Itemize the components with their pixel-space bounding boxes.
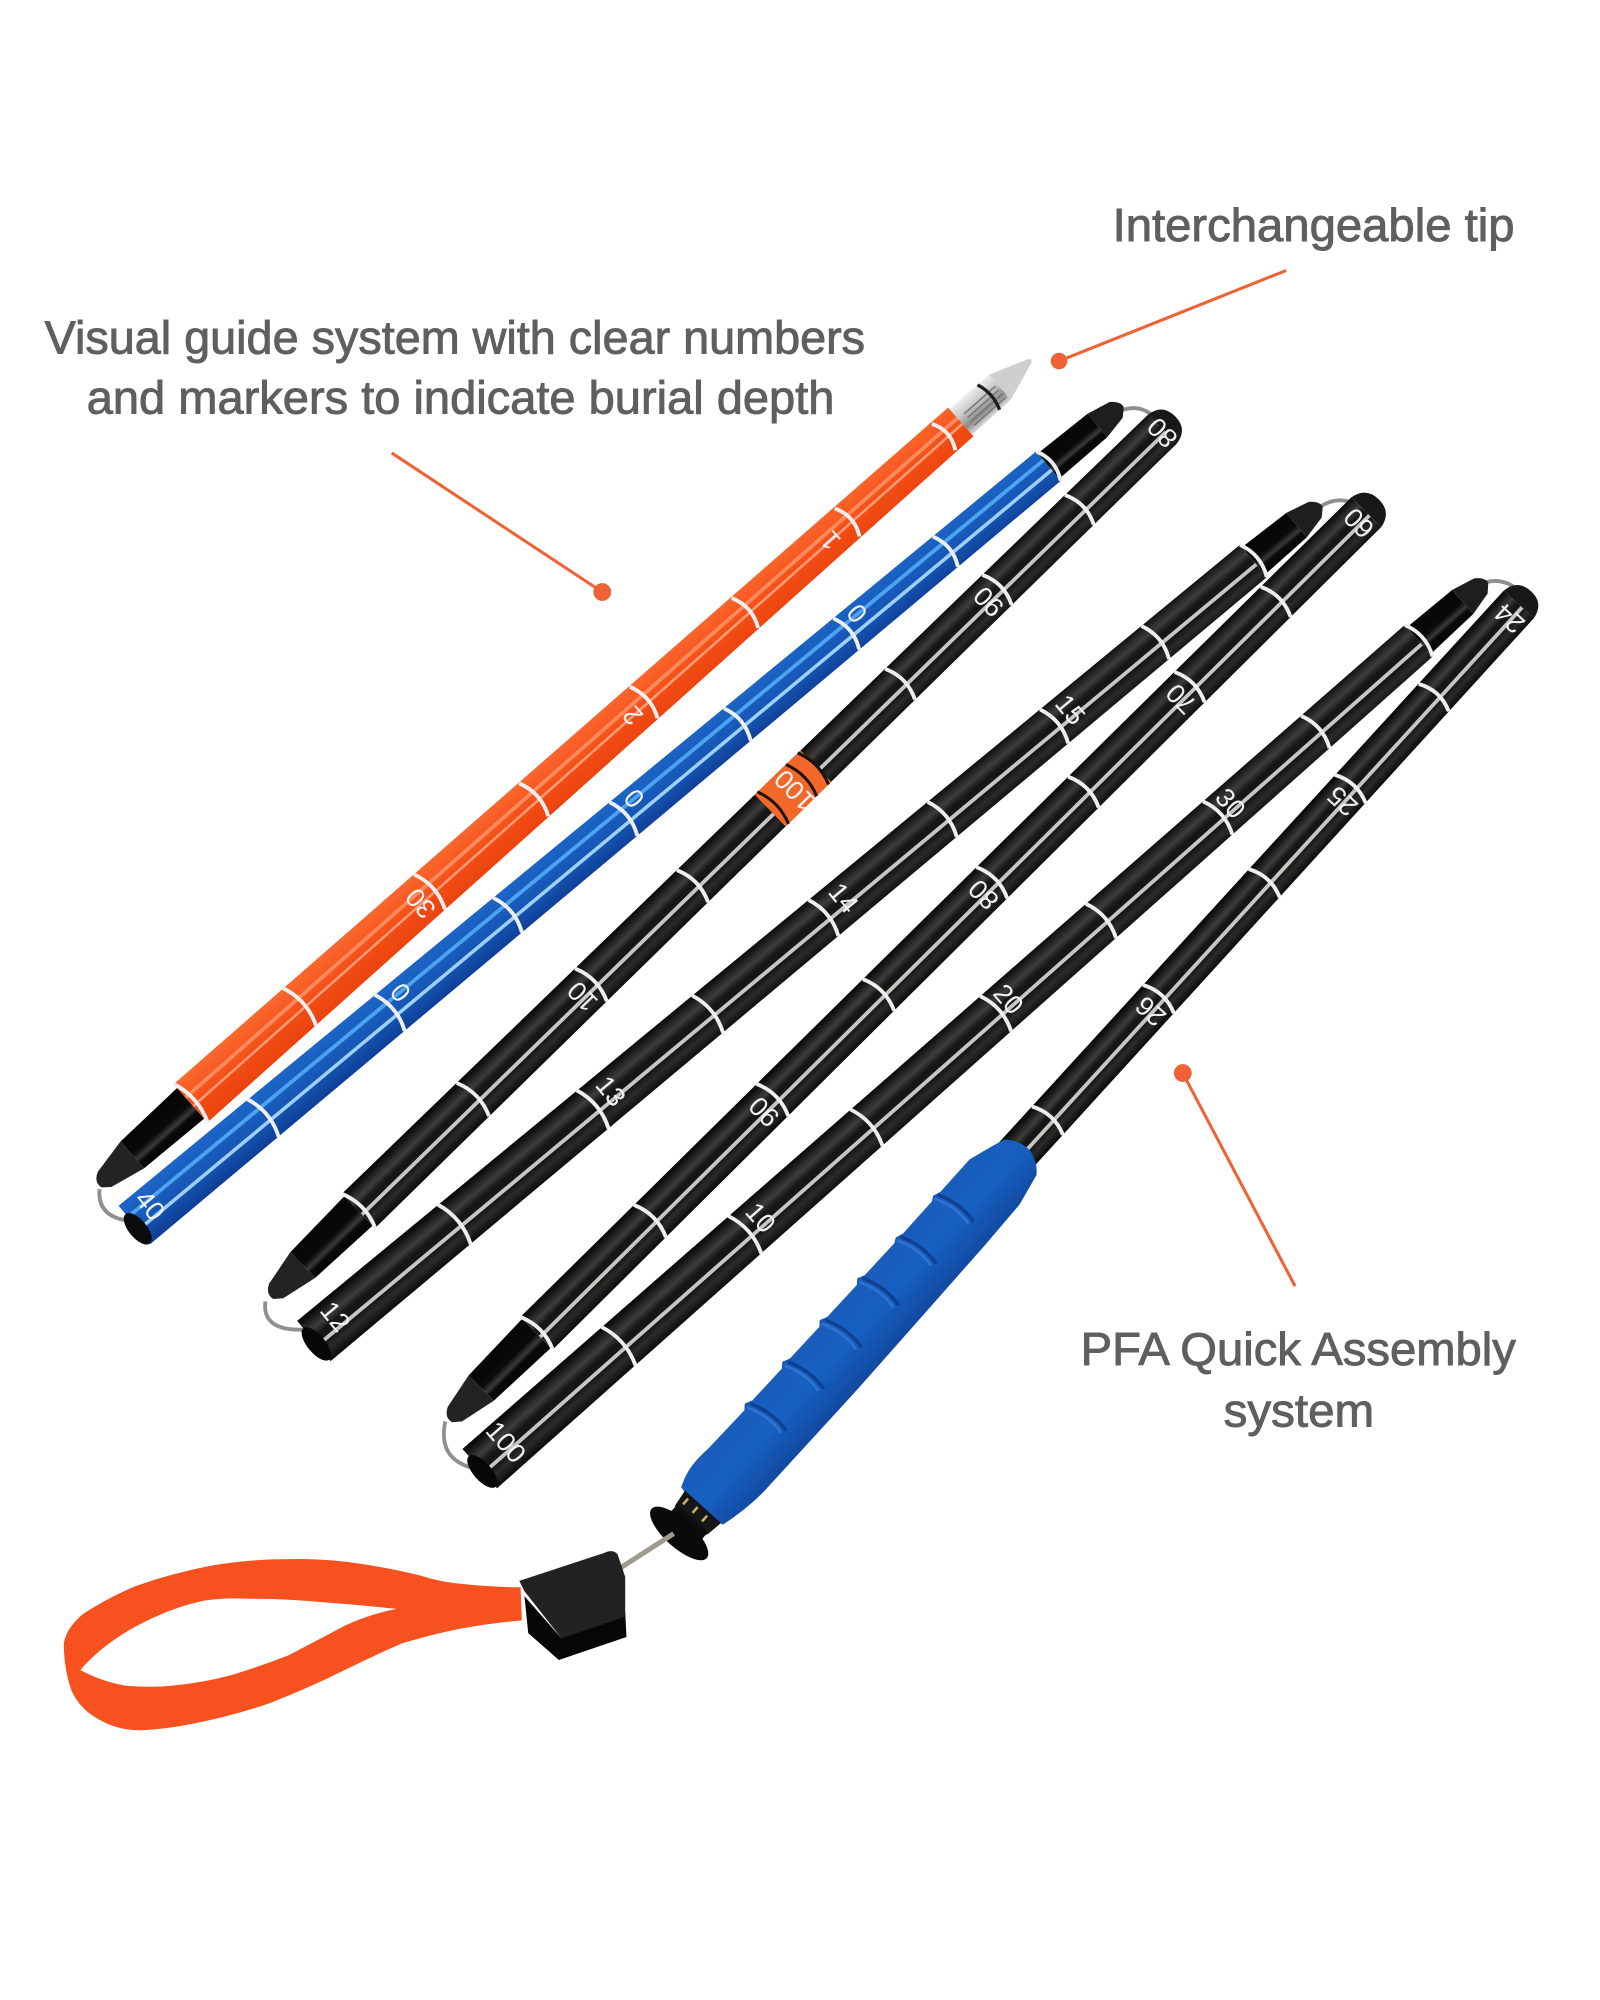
open tube end — [119, 1208, 157, 1249]
depth numbers — [1130, 597, 1531, 1032]
black connector — [256, 1196, 373, 1311]
depth numbers: 70 — [1160, 678, 1202, 720]
open tube end — [462, 1450, 502, 1493]
depth numbers: 25 — [1321, 780, 1364, 822]
depth numbers: 100 — [480, 1415, 532, 1469]
depth rings — [342, 489, 1100, 1228]
orange 100 band — [755, 750, 834, 828]
open tube end — [296, 1323, 336, 1365]
black tip — [1242, 491, 1333, 575]
depth numbers — [743, 502, 1380, 1133]
pole segment: black 24-26 — [999, 577, 1546, 1171]
black tube — [462, 621, 1436, 1488]
pole segment: orange with silver tip — [81, 340, 1049, 1204]
depth numbers: 26 — [1130, 990, 1172, 1032]
label: PFA quick assembly: PFA Quick Assembly — [1081, 1323, 1516, 1375]
depth numbers: 14 — [822, 877, 865, 919]
depth numbers: 30 — [1209, 782, 1251, 825]
depth numbers: 10 — [739, 1197, 782, 1239]
depth rings — [601, 618, 1440, 1366]
depth numbers — [129, 595, 881, 1226]
depth numbers — [314, 687, 1091, 1340]
callout line: interchangeable tip — [1051, 270, 1286, 369]
label: PFA quick assembly — [1081, 1323, 1516, 1436]
pole segment: black 80-90-100 — [254, 399, 1193, 1314]
black tube — [297, 541, 1270, 1361]
depth numbers: 60 — [1338, 502, 1380, 544]
black tube — [520, 496, 1383, 1350]
blue handle grip — [673, 1122, 1053, 1534]
grip ridges — [747, 1190, 975, 1437]
depth rings — [1032, 680, 1453, 1135]
pole segment: black 12-15 — [290, 485, 1338, 1367]
depth numbers: 24 — [1488, 597, 1531, 639]
handle end knob — [642, 1482, 731, 1569]
black tip — [1407, 567, 1499, 654]
depth numbers — [400, 519, 852, 924]
pole segment: blue — [112, 386, 1138, 1250]
depth numbers: 20 — [987, 978, 1029, 1020]
black top section — [1038, 392, 1133, 479]
depth rings — [520, 582, 1296, 1350]
depth numbers: 0 — [841, 598, 873, 629]
depth numbers: 15 — [1049, 689, 1091, 731]
steel wire to wrist strap — [620, 1534, 674, 1568]
black tube — [342, 412, 1179, 1228]
callout line: visual guide — [392, 453, 611, 601]
depth rings — [173, 414, 965, 1123]
label: visual guide system — [45, 311, 865, 423]
label: visual guide system: and markers to indicate burial depth — [87, 371, 834, 423]
label: visual guide system: Visual guide system with clear numbers — [45, 311, 865, 363]
black strap clip — [519, 1551, 626, 1660]
pole segment: black 100-30 — [456, 561, 1504, 1494]
depth numbers: 90 — [968, 580, 1010, 623]
orange tube — [174, 403, 978, 1122]
blue tube — [119, 447, 1064, 1244]
depth numbers: 0 — [618, 783, 651, 814]
callout line: quick assembly — [1174, 1064, 1295, 1286]
label: PFA quick assembly: system — [1224, 1384, 1374, 1436]
depth numbers: 80 — [962, 873, 1005, 916]
black connector — [435, 1319, 551, 1434]
orange 100 band: 100 — [768, 764, 821, 817]
label: interchangeable tip: Interchangeable tip — [1113, 199, 1515, 251]
depth numbers — [561, 411, 1184, 1018]
depth numbers: 80 — [1141, 411, 1184, 454]
depth rings — [438, 538, 1274, 1244]
depth numbers: 1 — [814, 525, 847, 556]
black connector — [85, 1088, 204, 1200]
depth numbers: 90 — [743, 1091, 785, 1133]
depth numbers: 40 — [129, 1184, 171, 1226]
depth numbers: 0 — [384, 977, 417, 1008]
black tube — [999, 590, 1534, 1171]
depth numbers: 13 — [590, 1070, 632, 1112]
pole segment: black 60-90 — [433, 483, 1395, 1436]
depth numbers: 30 — [400, 882, 442, 924]
silver tip — [949, 346, 1043, 435]
wire loops joining pole segments — [99, 408, 1523, 1470]
orange wrist strap — [64, 1559, 522, 1730]
depth numbers: 10 — [561, 975, 604, 1018]
depth numbers — [480, 777, 1256, 1469]
depth rings — [247, 444, 1068, 1137]
depth numbers: 12 — [314, 1296, 356, 1338]
depth numbers: 2 — [617, 700, 649, 731]
